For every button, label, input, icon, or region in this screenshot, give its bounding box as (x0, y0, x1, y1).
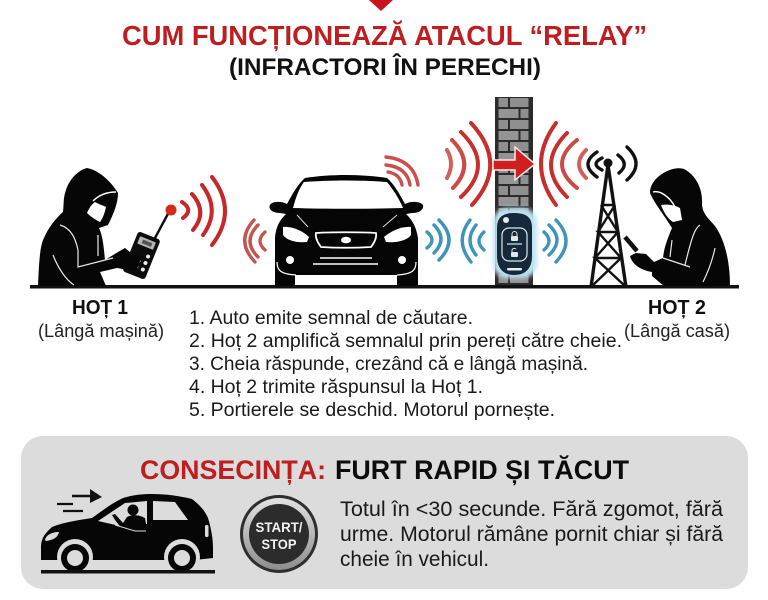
signal waves: thief 1 (182, 177, 225, 245)
label: thief 1: (Lângă mașină) (38, 321, 164, 341)
icon: start/stop button: STOP (262, 536, 296, 552)
consequence heading (140, 454, 630, 485)
signal waves: car left (245, 220, 265, 262)
steps list: 2. Hoț 2 amplifică semnalul prin pereți către cheie. (189, 331, 622, 352)
icon: start/stop button (240, 495, 318, 573)
icon: speed lines (57, 489, 102, 511)
signal waves: car top (386, 157, 418, 185)
consequence heading: FURT RAPID ȘI TĂCUT (335, 454, 630, 485)
ground line (30, 285, 739, 288)
signal waves: large red right of wall (541, 123, 586, 205)
steps list: 3. Cheia răspunde, crezând că e lângă mașină. (189, 354, 588, 375)
title (122, 20, 647, 81)
consequence description: Totul în <30 secunde. Fără zgomot, fără (340, 498, 723, 521)
icon: start/stop button: START/ (256, 519, 303, 535)
consequence description: urme. Motorul rămâne pornit chiar și fără (340, 523, 723, 546)
icon: getaway car (41, 494, 215, 575)
thief 2 silhouette (625, 168, 730, 286)
consequence heading: CONSECINȚA: (140, 455, 326, 485)
panel: consequence (21, 436, 748, 589)
label: thief 2 (624, 297, 730, 341)
label: thief 1: HOȚ 1 (72, 297, 128, 319)
thief 1 silhouette (38, 168, 143, 286)
consequence description (340, 498, 723, 571)
car key fob (493, 208, 537, 278)
steps list: 4. Hoț 2 trimite răspunsul la Hoț 1. (189, 377, 483, 398)
radio transmitter (122, 204, 176, 280)
consequence description: cheie în vehicul. (340, 548, 489, 571)
red arrow through wall (493, 147, 535, 180)
label: thief 1 (38, 297, 164, 341)
top marker arrow (369, 0, 393, 11)
title: CUM FUNCȚIONEAZĂ ATACUL “RELAY” (122, 20, 647, 51)
steps list: 5. Portierele se deschid. Motorul pornește. (189, 400, 555, 421)
relay tower (588, 147, 636, 287)
label: thief 2: (Lângă casă) (624, 321, 730, 341)
car front view (269, 175, 423, 286)
wall with bricks (495, 97, 533, 287)
steps list (189, 308, 622, 421)
label: thief 2: HOȚ 2 (648, 297, 706, 319)
steps list: 1. Auto emite semnal de căutare. (189, 308, 473, 329)
signal waves: large red left of wall (447, 123, 490, 205)
title: (INFRACTORI ÎN PERECHI) (229, 53, 541, 81)
signal waves: blue, car to key (427, 220, 566, 262)
